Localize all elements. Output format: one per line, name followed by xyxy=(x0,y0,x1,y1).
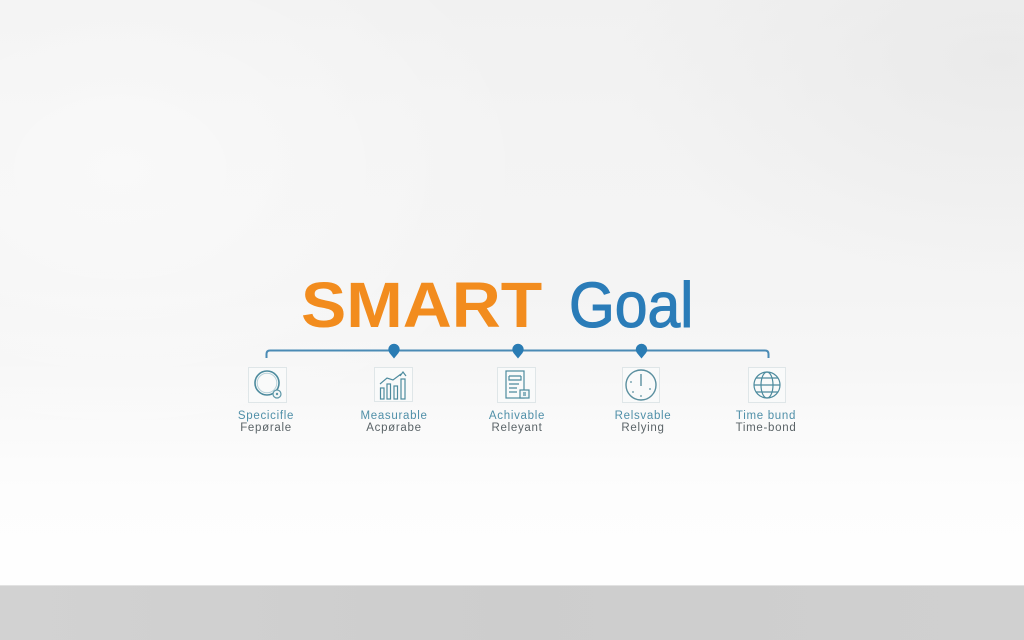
label: measurable xyxy=(360,410,428,434)
label: achievable: Releyant xyxy=(492,422,542,434)
label: time-bound xyxy=(736,410,796,434)
title xyxy=(301,269,693,341)
label: measurable: Acpørabe xyxy=(366,422,422,434)
icon: time-bound globe xyxy=(748,367,786,403)
label: relevant xyxy=(615,410,671,434)
timeline connector xyxy=(266,344,770,358)
label: time-bound: Time bund xyxy=(736,410,796,422)
marker 3 xyxy=(636,344,647,358)
icon: relevant clock xyxy=(622,367,660,403)
marker 1 xyxy=(388,344,400,358)
icon: achievable document xyxy=(497,367,536,403)
title word: Goal: Goal xyxy=(569,269,693,341)
label: time-bound: Time-bond xyxy=(736,422,796,434)
title word: SMART: SMART xyxy=(301,269,542,341)
icon: measurable chart xyxy=(374,367,413,402)
marker 2 xyxy=(512,344,524,358)
floor band xyxy=(0,585,1024,640)
label: specific: Fepørale xyxy=(240,422,292,434)
label: relevant: Relying xyxy=(621,422,665,434)
label: relevant: Relsvable xyxy=(615,410,671,422)
label: specific xyxy=(238,410,294,434)
label: achievable xyxy=(489,410,545,434)
label: measurable: Measurable xyxy=(360,410,428,422)
label: achievable: Achivable xyxy=(489,410,545,422)
icon: specific target xyxy=(248,367,287,403)
label: specific: Specicifle xyxy=(238,410,294,422)
